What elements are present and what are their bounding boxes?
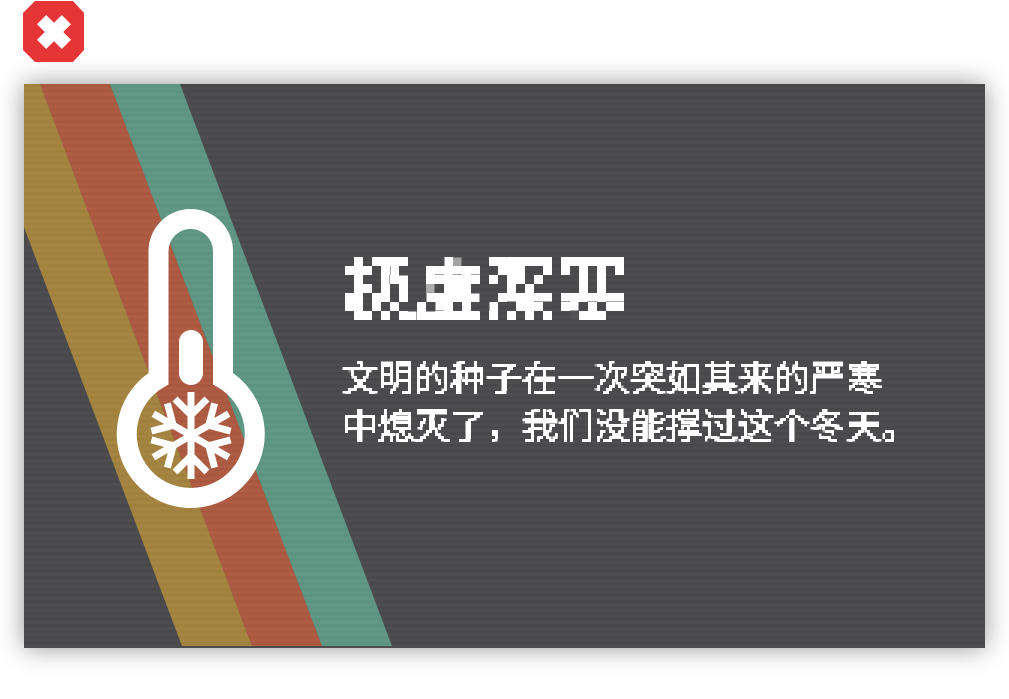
- icon: snowflake: [145, 392, 237, 479]
- icon: thermometer: [127, 219, 255, 498]
- scanline texture: [24, 84, 985, 648]
- body text: 文明的种子在一次突如其来的严寒: [342, 358, 882, 399]
- icon: red close badge: [23, 1, 84, 62]
- body text: [342, 358, 918, 447]
- stripe: ochre: [0, 84, 252, 646]
- body text: 中熄灭了，我们没能撑过这个冬天。: [342, 406, 918, 447]
- stripe: green: [110, 84, 392, 646]
- stripe: red: [40, 84, 322, 646]
- panel: dark background: [24, 84, 985, 648]
- title: 极度深寒: [345, 253, 625, 331]
- diagonal stripes: [0, 84, 392, 646]
